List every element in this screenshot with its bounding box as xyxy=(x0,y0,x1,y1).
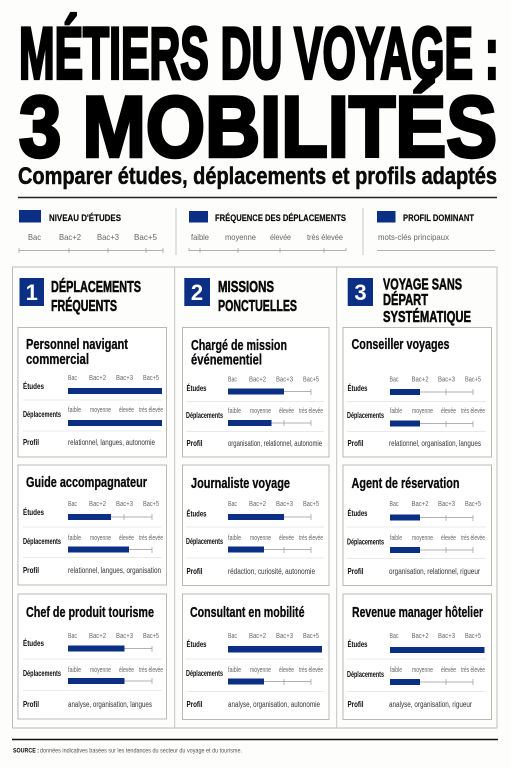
card: journaliste voyage: Études xyxy=(186,510,207,518)
card: guide accompagnateur: Guide accompagnateur xyxy=(26,475,147,491)
card: agent de réservation: Bac+2 xyxy=(412,501,429,508)
card: consultant en mobilité: faible xyxy=(228,667,241,674)
card: conseiller voyages: Bac xyxy=(390,376,399,384)
legend: profil dominant: PROFIL DOMINANT xyxy=(403,213,474,224)
legend: niveau d'études: Bac xyxy=(28,232,42,242)
card: guide accompagnateur: Études xyxy=(23,508,44,517)
card: chargé de mission événementiel: Études xyxy=(186,384,207,393)
card: chef de produit tourisme: Déplacements xyxy=(23,669,61,678)
card: chef de produit tourisme xyxy=(18,594,166,719)
card: chef de produit tourisme: Profil xyxy=(23,700,39,709)
card: chef de produit tourisme: très élevée xyxy=(139,667,163,674)
legend: fréquence des déplacements: moyenne xyxy=(225,232,256,242)
card: revenue manager hôtelier: Déplacements xyxy=(347,670,384,679)
card: guide accompagnateur: moyenne xyxy=(90,535,111,542)
card: revenue manager hôtelier: Bac+2 xyxy=(412,633,429,640)
legend: niveau d'études: Bac+5 xyxy=(134,232,157,242)
column heading 2: 2 xyxy=(191,280,203,305)
source note: SOURCE : xyxy=(13,748,39,754)
card: personnel navigant commercial: Déplacements xyxy=(23,410,61,419)
card: consultant en mobilité: Bac+3 xyxy=(276,633,293,640)
card: agent de réservation: Études xyxy=(348,509,368,518)
card: personnel navigant commercial: élevée xyxy=(119,407,134,414)
legend xyxy=(19,208,495,255)
column heading 3: VOYAGE SANS xyxy=(383,276,462,294)
card: journaliste voyage: très élevée xyxy=(299,535,323,542)
card: revenue manager hôtelier: élevée xyxy=(441,667,456,674)
card: revenue manager hôtelier: Bac+5 xyxy=(465,633,481,640)
card: consultant en mobilité: analyse, organisation, autonomie xyxy=(228,700,320,709)
card: agent de réservation: Profil xyxy=(348,567,364,576)
column heading 3: SYSTÉMATIQUE xyxy=(383,307,471,326)
card: revenue manager hôtelier: Profil xyxy=(348,700,364,709)
card: chef de produit tourisme: Bac xyxy=(68,633,77,640)
card: agent de réservation: Déplacements xyxy=(347,538,384,546)
card: revenue manager hôtelier: faible xyxy=(390,667,402,674)
card: chargé de mission événementiel: Profil xyxy=(186,439,202,448)
card: conseiller voyages: très élevée xyxy=(461,408,485,415)
card: guide accompagnateur: Déplacements xyxy=(23,537,61,546)
legend: fréquence des déplacements: élevée xyxy=(270,232,291,242)
card: personnel navigant commercial: Bac xyxy=(68,375,77,382)
card: conseiller voyages: Conseiller voyages xyxy=(352,337,450,353)
card: consultant en mobilité: très élevée xyxy=(299,667,323,674)
card: journaliste voyage: rédaction, curiosité, autonomie xyxy=(228,567,315,576)
card: agent de réservation: faible xyxy=(390,535,402,542)
card: chef de produit tourisme: Bac+5 xyxy=(143,633,159,640)
card: consultant en mobilité: Bac xyxy=(228,633,237,640)
card: personnel navigant commercial: Profil xyxy=(23,438,39,447)
card: chef de produit tourisme: Bac+3 xyxy=(116,633,133,640)
card: conseiller voyages: Bac+3 xyxy=(438,376,455,384)
card: consultant en mobilité: Études xyxy=(186,640,207,649)
card: journaliste voyage: Déplacements xyxy=(186,537,223,546)
column heading 2: PONCTUELLES xyxy=(218,298,297,315)
card: guide accompagnateur: Bac+3 xyxy=(116,501,133,508)
card: conseiller voyages: Études xyxy=(348,384,368,393)
card: conseiller voyages: Déplacements xyxy=(347,411,384,420)
card: personnel navigant commercial: Bac+3 xyxy=(116,375,133,382)
panel: missions ponctuelles xyxy=(182,278,329,720)
card: personnel navigant commercial: Études xyxy=(23,382,44,391)
card: personnel navigant commercial xyxy=(18,328,166,457)
card: journaliste voyage: Journaliste voyage xyxy=(191,476,290,492)
legend: fréquence des déplacements xyxy=(189,211,346,253)
card: chargé de mission événementiel xyxy=(182,328,329,457)
card: agent de réservation: Bac+5 xyxy=(465,501,481,508)
card: chargé de mission événementiel: très élevée xyxy=(299,408,323,415)
card: agent de réservation xyxy=(343,465,492,586)
legend: niveau d'études: Bac+3 xyxy=(97,232,119,242)
card: chef de produit tourisme: Chef de produit tourisme xyxy=(26,605,154,621)
card: chargé de mission événementiel: événementiel xyxy=(191,352,262,368)
card: personnel navigant commercial: Bac+5 xyxy=(143,375,159,382)
card: conseiller voyages: Profil xyxy=(348,439,364,448)
card: journaliste voyage: Profil xyxy=(186,567,202,576)
card: consultant en mobilité: Bac+5 xyxy=(303,633,319,640)
legend: fréquence des déplacements: très élevée xyxy=(307,232,343,242)
card: journaliste voyage: Bac+3 xyxy=(276,501,293,508)
card: chef de produit tourisme: Bac+2 xyxy=(89,633,106,640)
card: journaliste voyage xyxy=(182,465,329,586)
card: revenue manager hôtelier: analyse, organisation, rigueur xyxy=(389,700,472,709)
column heading 1: DÉPLACEMENTS xyxy=(51,277,141,296)
card: guide accompagnateur: Bac+2 xyxy=(89,501,106,508)
card: consultant en mobilité: moyenne xyxy=(250,667,271,674)
card: personnel navigant commercial: moyenne xyxy=(90,407,111,414)
card: agent de réservation: organisation, relationnel, rigueur xyxy=(389,567,480,576)
card: journaliste voyage: Bac+5 xyxy=(303,501,319,508)
card: personnel navigant commercial: commercial xyxy=(26,352,89,368)
card: revenue manager hôtelier: très élevée xyxy=(461,667,485,674)
card: conseiller voyages: élevée xyxy=(441,408,456,415)
card: chef de produit tourisme: élevée xyxy=(119,667,134,674)
column heading 2 xyxy=(184,278,297,315)
card: guide accompagnateur: élevée xyxy=(119,535,134,542)
legend: profil dominant: mots-clés principaux xyxy=(378,232,450,242)
card: journaliste voyage: élevée xyxy=(279,535,294,542)
card: personnel navigant commercial: faible xyxy=(68,407,81,414)
source note: données indicatives basées sur les tendances du secteur du voyage et du tourisme. xyxy=(40,748,242,754)
card: agent de réservation: moyenne xyxy=(412,535,433,542)
card: guide accompagnateur: très élevée xyxy=(139,535,163,542)
card: agent de réservation: Bac+3 xyxy=(438,501,455,508)
column heading 3: 3 xyxy=(354,280,367,305)
card: guide accompagnateur xyxy=(18,465,166,585)
legend: fréquence des déplacements: faible xyxy=(191,232,209,242)
card: agent de réservation: très élevée xyxy=(461,535,485,542)
panel: déplacements fréquents xyxy=(18,277,166,719)
card: chargé de mission événementiel: élevée xyxy=(279,408,294,415)
card: chargé de mission événementiel: Bac+2 xyxy=(249,376,266,384)
card: consultant en mobilité: Consultant en mobilité xyxy=(190,605,304,621)
card: personnel navigant commercial: relationnel, langues, autonomie xyxy=(68,438,155,447)
column heading 1: 1 xyxy=(26,280,38,305)
title xyxy=(19,14,499,176)
card: agent de réservation: Bac xyxy=(390,501,399,508)
panel: outer frame xyxy=(12,267,497,728)
legend: fréquence des déplacements: FRÉQUENCE DES DÉPLACEMENTS xyxy=(215,213,346,224)
card: consultant en mobilité: Déplacements xyxy=(186,669,223,678)
card: consultant en mobilité: Profil xyxy=(186,700,202,709)
column heading 3: DÉPART xyxy=(383,290,428,309)
column heading 1: FRÉQUENTS xyxy=(51,296,117,315)
card: conseiller voyages xyxy=(343,328,492,457)
card: guide accompagnateur: Bac+5 xyxy=(143,501,159,508)
card: chef de produit tourisme: moyenne xyxy=(90,667,111,674)
card: journaliste voyage: faible xyxy=(228,535,241,542)
legend: niveau d'études: NIVEAU D'ÉTUDES xyxy=(49,213,121,224)
card: chargé de mission événementiel: Bac+5 xyxy=(303,376,319,384)
card: conseiller voyages: faible xyxy=(390,408,402,415)
card: guide accompagnateur: Bac xyxy=(68,501,77,508)
card: consultant en mobilité xyxy=(182,594,329,720)
card: consultant en mobilité: Bac+2 xyxy=(249,633,266,640)
card: chargé de mission événementiel: Chargé de mission xyxy=(191,338,287,354)
card: revenue manager hôtelier xyxy=(343,594,492,720)
card: conseiller voyages: moyenne xyxy=(412,408,433,415)
card: conseiller voyages: relationnel, organisation, langues xyxy=(389,439,481,448)
card: chargé de mission événementiel: faible xyxy=(228,408,241,415)
card: chargé de mission événementiel: Bac xyxy=(228,376,237,384)
card: conseiller voyages: Bac+5 xyxy=(465,376,481,384)
column heading 1 xyxy=(20,277,141,315)
legend: niveau d'études xyxy=(19,210,163,253)
card: personnel navigant commercial: Bac+2 xyxy=(89,375,106,382)
card: journaliste voyage: Bac+2 xyxy=(249,501,266,508)
card: revenue manager hôtelier: Bac+3 xyxy=(438,633,455,640)
column heading 3 xyxy=(348,276,471,326)
card: revenue manager hôtelier: Études xyxy=(348,640,368,649)
column heading 2: MISSIONS xyxy=(218,279,274,296)
card: revenue manager hôtelier: moyenne xyxy=(412,667,433,674)
card: journaliste voyage: moyenne xyxy=(250,535,271,542)
card: conseiller voyages: Bac+2 xyxy=(412,376,429,384)
card: journaliste voyage: Bac xyxy=(228,501,237,508)
card: guide accompagnateur: faible xyxy=(68,535,81,542)
card: chargé de mission événementiel: Bac+3 xyxy=(276,376,293,384)
card: chef de produit tourisme: faible xyxy=(68,667,81,674)
card: guide accompagnateur: relationnel, langues, organisation xyxy=(68,566,161,575)
card: chargé de mission événementiel: organisation, relationnel, autonomie xyxy=(228,439,322,448)
card: personnel navigant commercial: très élevée xyxy=(139,407,163,414)
panel: voyage sans départ systématique xyxy=(343,276,492,720)
card: personnel navigant commercial: Personnel navigant xyxy=(26,337,128,353)
card: chef de produit tourisme: analyse, organisation, langues xyxy=(68,700,152,709)
legend: profil dominant xyxy=(377,211,495,250)
legend: niveau d'études: Bac+2 xyxy=(59,232,81,242)
card: revenue manager hôtelier: Bac xyxy=(390,633,399,640)
card: chef de produit tourisme: Études xyxy=(23,639,44,648)
card: chargé de mission événementiel: Déplacements xyxy=(186,411,223,420)
card: agent de réservation: Agent de réservation xyxy=(352,476,460,492)
card: guide accompagnateur: Profil xyxy=(23,566,39,575)
card: agent de réservation: élevée xyxy=(441,535,456,542)
card: consultant en mobilité: élevée xyxy=(279,667,294,674)
card: chargé de mission événementiel: moyenne xyxy=(250,408,271,415)
